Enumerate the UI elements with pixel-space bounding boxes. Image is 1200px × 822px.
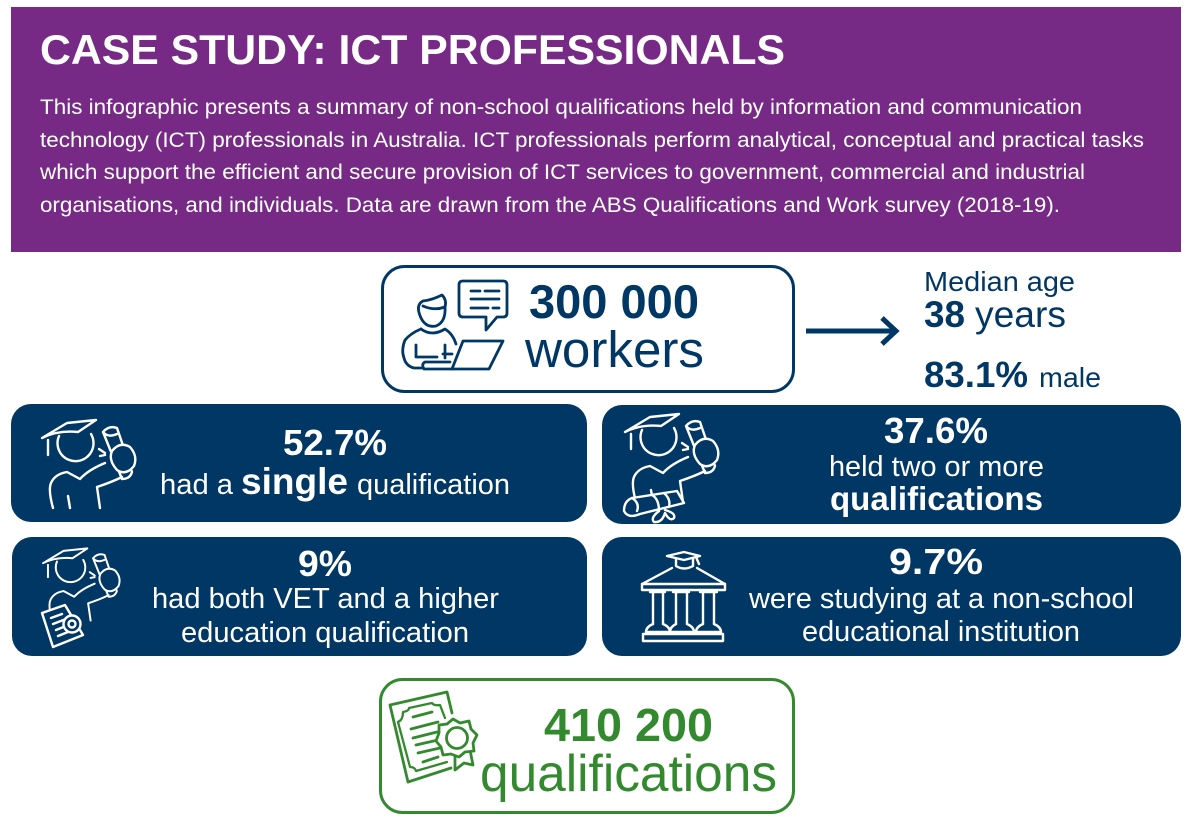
age value: 38 bbox=[924, 294, 965, 335]
stat text: education qualification bbox=[181, 617, 469, 649]
panel: VET and higher education bbox=[12, 537, 587, 656]
stat text: qualification bbox=[357, 469, 510, 501]
qualifications count: 410 200 bbox=[544, 699, 713, 751]
panel: single qualification bbox=[11, 404, 587, 522]
icon: graduate with diploma bbox=[42, 420, 135, 508]
median age: Median age bbox=[924, 266, 1075, 297]
stat text: 9% bbox=[298, 543, 352, 584]
stat text: educational institution bbox=[802, 616, 1080, 648]
qualifications box bbox=[380, 680, 794, 812]
age value bbox=[924, 294, 1066, 335]
stat text bbox=[829, 410, 1044, 517]
stat text bbox=[160, 422, 510, 502]
stat text: qualifications bbox=[830, 480, 1043, 517]
arrow bbox=[806, 318, 896, 344]
icon: graduate with certificate bbox=[42, 548, 120, 647]
workers box bbox=[382, 266, 794, 392]
percent male: 83.1% bbox=[924, 354, 1028, 395]
qualifications label: qualifications bbox=[480, 744, 777, 802]
demographics bbox=[924, 266, 1101, 395]
intro text: which support the efficient and secure provision of ICT services to government, commercial and industrial bbox=[39, 160, 1085, 184]
stat text: 37.6% bbox=[884, 410, 988, 451]
icon: worker at laptop with speech bubble bbox=[403, 281, 507, 369]
stat text: 9.7% bbox=[889, 541, 983, 582]
intro text: technology (ICT) professionals in Australia. ICT professionals perform analytical, conceptual and practical tasks bbox=[40, 128, 1144, 152]
stat text: held two or more bbox=[829, 451, 1044, 483]
stat text: had a bbox=[160, 469, 234, 501]
stat text: had both VET and a higher bbox=[152, 583, 499, 615]
stat text bbox=[748, 541, 1134, 648]
icon: graduate with two diplomas bbox=[624, 414, 718, 522]
icon: certificate with seal bbox=[390, 692, 477, 782]
stat text: 52.7% bbox=[283, 422, 387, 463]
stat text: single bbox=[241, 461, 348, 502]
workers count: 300 000 bbox=[529, 275, 699, 328]
percent male bbox=[924, 354, 1101, 395]
title: CASE STUDY: ICT PROFESSIONALS bbox=[40, 26, 785, 73]
intro text bbox=[39, 95, 1144, 217]
icon: institution building bbox=[642, 552, 725, 641]
panel: currently studying bbox=[602, 537, 1181, 656]
header panel bbox=[11, 7, 1181, 252]
stat text: were studying at a non-school bbox=[748, 583, 1134, 615]
age value: years bbox=[975, 294, 1066, 335]
percent male: male bbox=[1039, 362, 1101, 393]
stat text bbox=[152, 543, 499, 649]
panel: two or more qualifications bbox=[602, 405, 1181, 524]
intro text: This infographic presents a summary of non-school qualifications held by information and communication bbox=[40, 95, 1082, 119]
workers label: workers bbox=[524, 321, 704, 378]
intro text: organisations, and individuals. Data are drawn from the ABS Qualifications and Work survey (2018-19). bbox=[40, 193, 1060, 217]
